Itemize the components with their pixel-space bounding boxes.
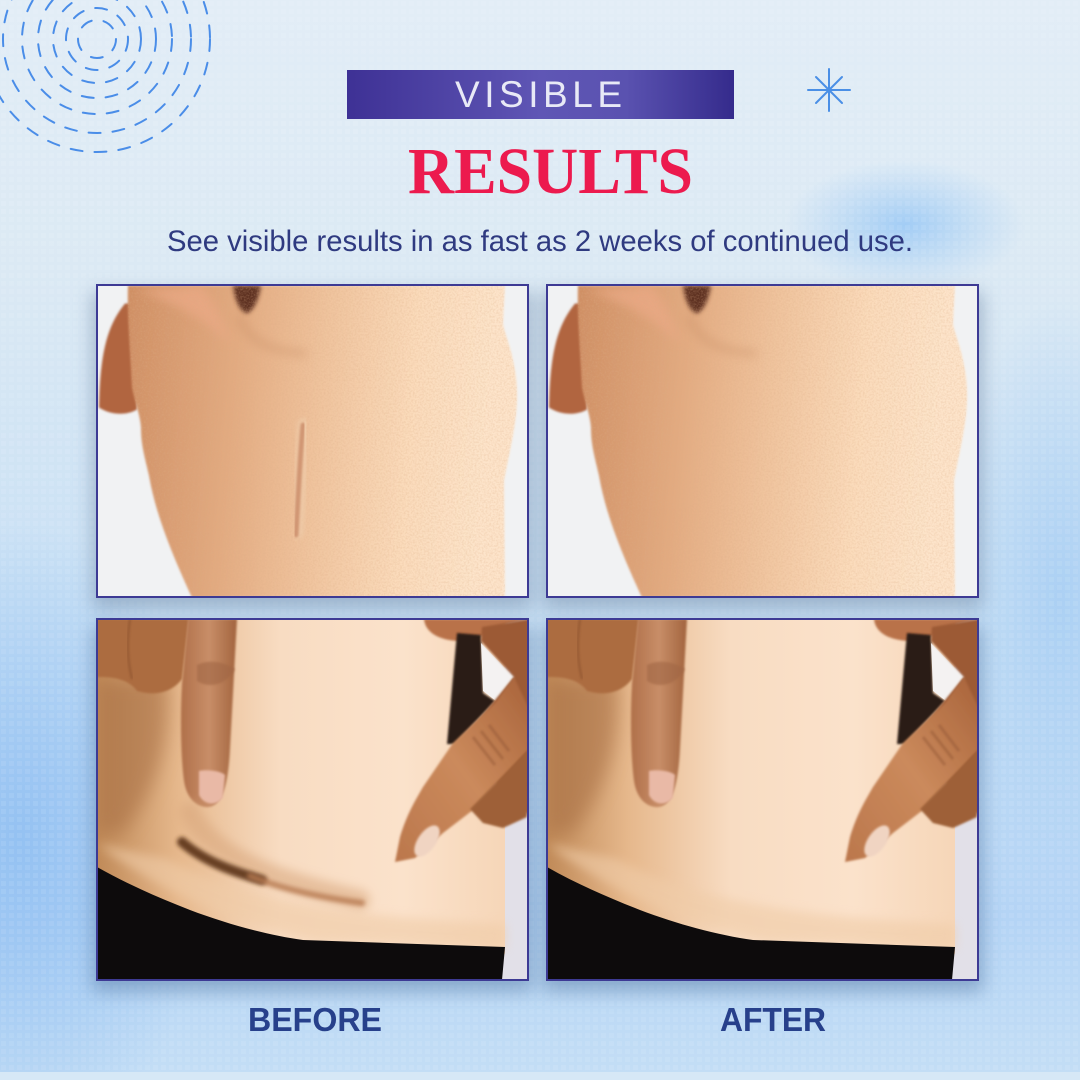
panel shadows [92,292,983,992]
scar on hand [296,425,304,535]
panel: after, abdomen healed [547,619,979,980]
label: BEFORE: BEFORE [248,1001,382,1038]
subtitle: See visible results in as fast as 2 weeks of continued use. [167,225,913,258]
panel: before, hand scar [97,285,529,598]
label: AFTER: AFTER [720,1001,826,1038]
heading banner: VISIBLE [347,70,734,119]
icon: sparkle star [808,69,850,111]
heading banner: VISIBLE: VISIBLE [455,74,622,115]
panel: before, abdomen scar [97,619,529,980]
panel: after, hand healed [547,285,979,598]
heading: RESULTS: RESULTS [408,135,693,208]
decorative dashed concentric circles [0,0,210,152]
scar on abdomen [182,812,362,903]
